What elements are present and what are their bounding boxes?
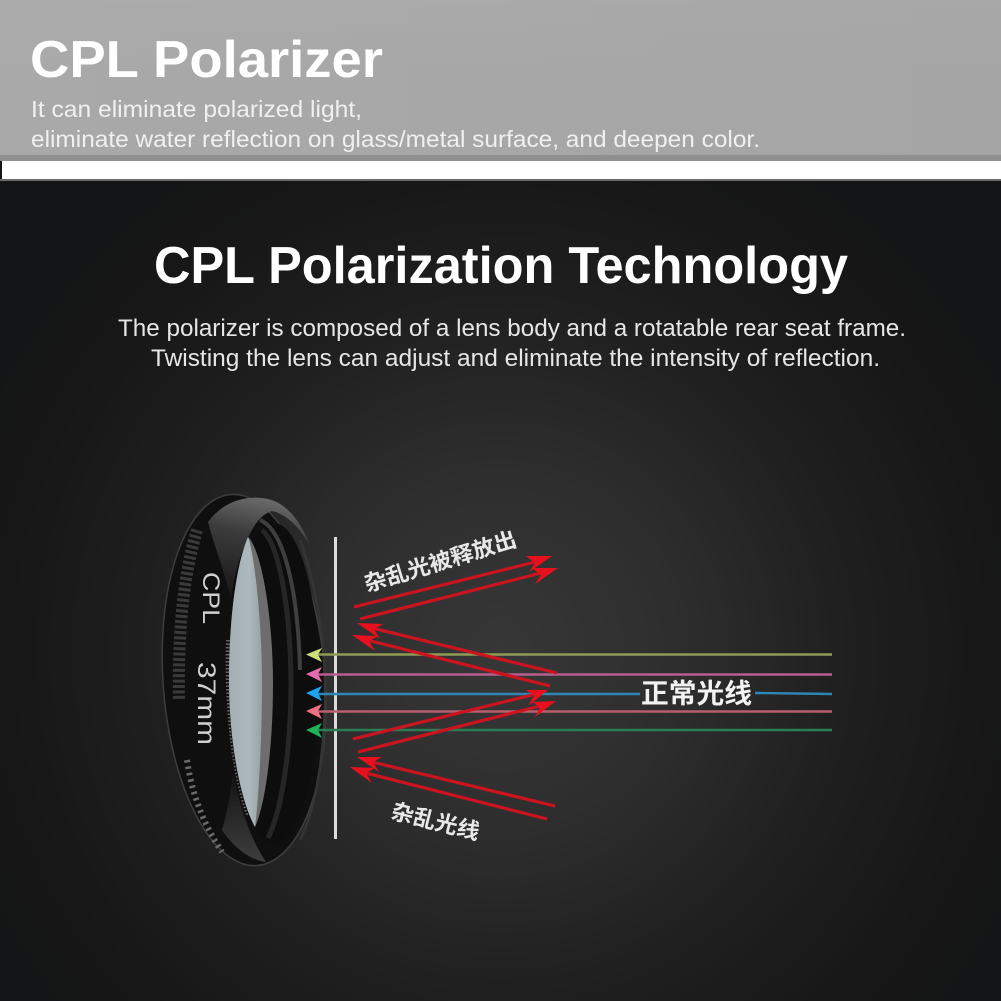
lens: CPL filter 37mm bbox=[150, 489, 338, 871]
lens marking: CPL: CPL bbox=[197, 572, 224, 624]
label: stray light released: 杂乱光被释放出 bbox=[361, 527, 520, 597]
panel: grey header band bbox=[0, 0, 1001, 181]
arrows: normal light rays bbox=[306, 648, 832, 738]
label: normal light: 正常光线 bbox=[641, 679, 752, 709]
text block: technology description: The polarizer is composed of a lens body and a rotatable rear seat frame. bbox=[118, 315, 906, 342]
text block: technology description bbox=[118, 315, 906, 372]
text block: header description: It can eliminate polarized light, bbox=[31, 96, 362, 122]
lens marking: 37mm: 37mm bbox=[192, 662, 220, 745]
arrows: stray light red rays bbox=[350, 556, 558, 819]
title: CPL Polarizer: CPL Polarizer bbox=[30, 31, 383, 89]
label: stray light: 杂乱光线 bbox=[389, 799, 482, 845]
text block: header description bbox=[31, 96, 760, 152]
lens glass bbox=[229, 537, 262, 827]
heading: CPL Polarization Technology: CPL Polarization Technology bbox=[154, 237, 848, 295]
text block: technology description: Twisting the lens can adjust and eliminate the intensity of reflection. bbox=[151, 345, 880, 372]
divider: polarizer plane line bbox=[334, 537, 337, 839]
text block: header description: eliminate water reflection on glass/metal surface, and deepen color. bbox=[31, 126, 760, 152]
